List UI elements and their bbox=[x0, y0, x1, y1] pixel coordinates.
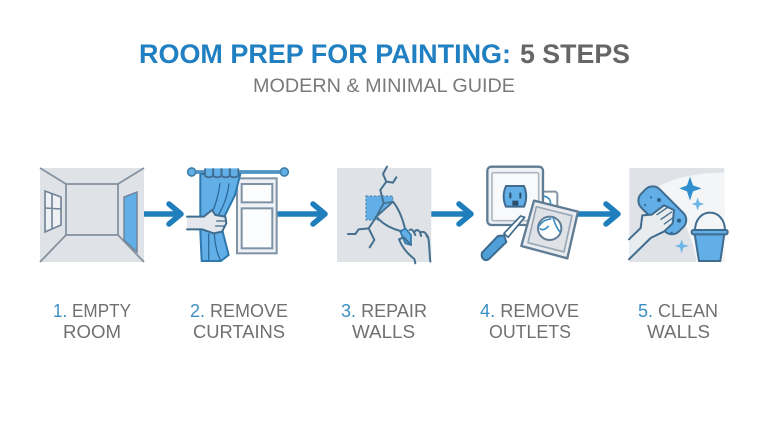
sponge pores bbox=[644, 196, 681, 234]
arrow: step 4 to 5 bbox=[576, 204, 618, 224]
hand bbox=[399, 228, 430, 263]
arrow: step 2 to 3 bbox=[277, 204, 325, 224]
label: step 4: OUTLETS bbox=[489, 322, 571, 342]
putty knife bbox=[376, 202, 405, 231]
door bbox=[124, 192, 137, 252]
arrow: step 1 to 2 bbox=[144, 204, 181, 224]
bucket bbox=[692, 213, 728, 261]
label: step 3: WALLS bbox=[352, 322, 415, 342]
window bbox=[45, 191, 61, 232]
sponge bbox=[634, 182, 690, 238]
title: 5 STEPS bbox=[520, 39, 630, 69]
icon: remove outlets bbox=[482, 167, 578, 260]
icon: remove curtains bbox=[187, 168, 288, 261]
label: step 1 bbox=[53, 301, 131, 342]
wall plate bbox=[487, 167, 543, 225]
wire box bbox=[541, 192, 557, 208]
label: step 1: 1. EMPTY bbox=[53, 301, 131, 321]
icon: clean walls bbox=[629, 168, 728, 262]
label: step 1: ROOM bbox=[63, 322, 121, 342]
label: step 4: 4. REMOVE bbox=[480, 301, 579, 321]
label: step 2 bbox=[190, 301, 288, 342]
hand bbox=[629, 205, 674, 259]
wiped clean area bbox=[656, 173, 724, 262]
label: step 2: 2. REMOVE bbox=[190, 301, 288, 321]
outlet bbox=[504, 186, 526, 207]
curtain bbox=[200, 168, 240, 261]
icon: empty room bbox=[40, 168, 144, 262]
label: step 5 bbox=[638, 301, 718, 342]
window frame bbox=[237, 178, 277, 253]
subtitle: MODERN & MINIMAL GUIDE bbox=[253, 75, 515, 97]
cracks bbox=[348, 167, 396, 247]
label: step 5: 5. CLEAN bbox=[638, 301, 718, 321]
sparkles bbox=[675, 177, 704, 253]
removed cover plate bbox=[521, 201, 578, 258]
label: step 5: WALLS bbox=[647, 322, 710, 342]
patch bbox=[366, 196, 393, 220]
curtain rod bbox=[188, 168, 288, 176]
label: step 3 bbox=[341, 301, 427, 342]
label: step 4 bbox=[480, 301, 579, 342]
arrow: step 3 to 4 bbox=[431, 204, 471, 224]
hand bbox=[187, 210, 226, 233]
label: step 3: 3. REPAIR bbox=[341, 301, 427, 321]
label: step 2: CURTAINS bbox=[193, 322, 285, 342]
icon: repair walls bbox=[337, 167, 431, 263]
title: ROOM PREP FOR PAINTING: bbox=[139, 39, 511, 69]
screwdriver bbox=[482, 216, 525, 260]
